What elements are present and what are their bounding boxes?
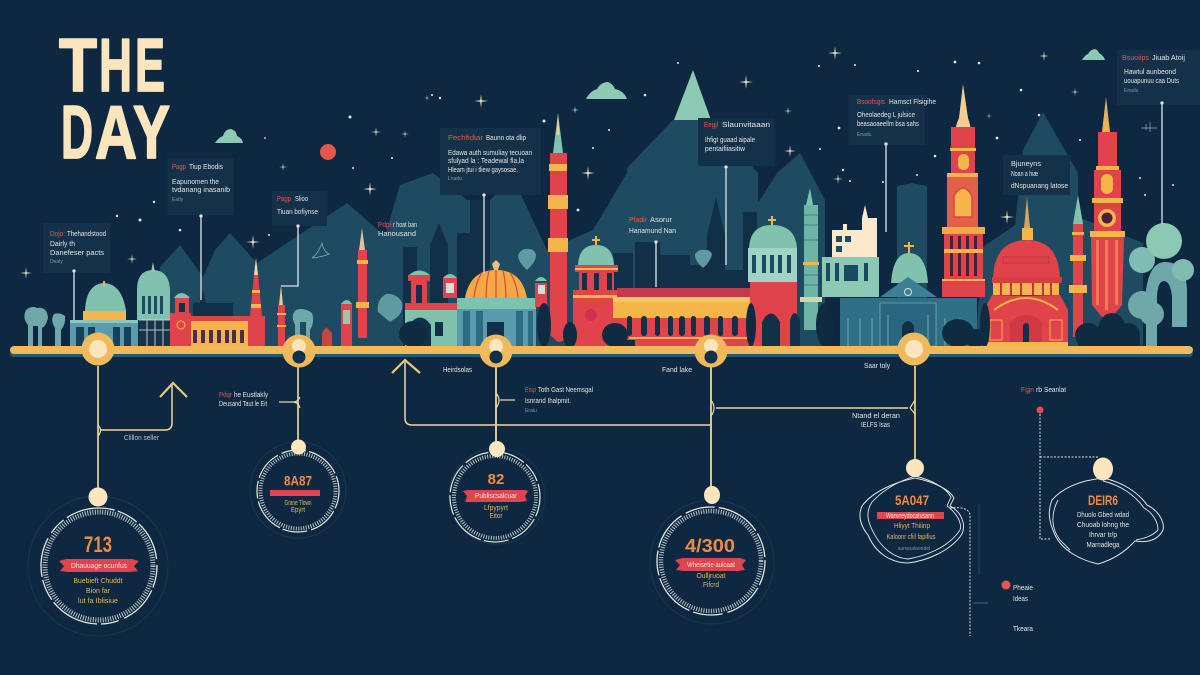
building: teal tower xyxy=(800,188,822,330)
info box 2: Eatly xyxy=(172,197,184,203)
info box 2: Pagp xyxy=(172,164,186,171)
building: tall red clock tower xyxy=(1090,97,1125,323)
stat blob 5: Kaloonr cfiil fapifius xyxy=(886,532,936,541)
stat blob 6 xyxy=(1049,458,1163,564)
info box 5: Hleam jtui i tliew gaysosae. xyxy=(448,167,518,174)
info box 10: Enadu xyxy=(1124,88,1139,94)
info box 1: Thehandstood xyxy=(67,231,106,238)
small sky sketches xyxy=(312,122,1157,258)
info text 7: Asorur xyxy=(650,217,673,224)
info box 10: Hawtul aunbeond xyxy=(1124,69,1176,76)
building: red palace with clock xyxy=(170,258,265,346)
info box 8: beasaoaeellm bsa sahs xyxy=(857,121,919,128)
timeline labels: Isnrand Ihalpmit. xyxy=(525,398,571,405)
dashed connectors xyxy=(950,414,1098,636)
timeline bar xyxy=(10,346,1193,357)
title: D xyxy=(61,90,93,174)
timeline labels: IELFS Isas xyxy=(861,422,890,429)
building: left domed hall xyxy=(70,281,138,346)
info box 9: Noan a hiæ xyxy=(1011,171,1038,178)
info box 2: Eapunomen the xyxy=(172,179,219,186)
info box 5: Baunn ota dlip xyxy=(486,135,526,142)
info box 9: dNspuanang latose xyxy=(1011,183,1068,190)
title: H xyxy=(99,23,132,107)
stat blob 6: DEIR6 xyxy=(1088,492,1118,508)
building: small minaret xyxy=(277,285,286,346)
mountains xyxy=(160,70,1143,346)
info box 5: Edawa auth sumuliay tecuoan xyxy=(448,150,532,157)
stat circle 4: 4/300 xyxy=(685,536,735,556)
stat circle 2 xyxy=(250,440,346,538)
side notes: Pheaie xyxy=(1013,585,1033,592)
side notes xyxy=(973,406,1044,633)
stat circle 4: Fifcrd xyxy=(703,580,719,589)
info box 2: Tiup Ebodis xyxy=(189,164,223,171)
timeline labels: Deusand Taut le Eit xyxy=(219,401,267,408)
info box 6: Ihfigt guaad aipale xyxy=(705,137,755,144)
info box 6: pentaifiiasitiw xyxy=(705,146,746,153)
stat circle 3: Publiscsalcuar xyxy=(475,493,518,500)
foreground bushes xyxy=(399,303,1140,348)
info box 8: Enadu xyxy=(857,132,872,138)
title: Y xyxy=(133,90,170,174)
info box 3: Slioo xyxy=(295,196,308,203)
small trees xyxy=(24,249,712,346)
timeline labels: Clillon seller xyxy=(124,435,160,442)
info box 8 xyxy=(849,95,936,145)
info box 8: Bsoofsgis xyxy=(857,99,885,106)
info box 5: sfulyad la : Teadewal fla,la xyxy=(448,158,524,165)
info box 3 xyxy=(272,191,327,226)
info box 3: Pagp xyxy=(277,196,291,203)
info text 4: Pdpi xyxy=(378,222,391,229)
title xyxy=(59,23,170,174)
building: red dome hall xyxy=(984,197,1068,346)
title: E xyxy=(135,23,165,107)
building: long palace xyxy=(613,288,750,346)
leader lines xyxy=(73,102,1163,320)
info box 10: Jiuab Atoij xyxy=(1152,55,1185,62)
stat blob 5: sunsoalaondel xyxy=(898,546,930,552)
timeline labels: Eisp xyxy=(525,387,536,394)
info box 8: Oheolaedeg L julsice xyxy=(857,112,915,119)
timeline labels: Pdqr xyxy=(219,392,233,399)
stat circle 1: Bion far xyxy=(86,586,110,595)
stat circle 1: Buebieft Chuddt xyxy=(74,576,123,585)
starry sky xyxy=(20,46,1174,279)
timeline labels: Fgjn xyxy=(1021,387,1034,394)
info text 4: Hanousand xyxy=(378,231,416,238)
building: blue domed hall xyxy=(840,242,977,346)
info text 4 xyxy=(378,222,417,238)
timeline labels xyxy=(124,363,1066,442)
info box 9 xyxy=(1003,155,1070,195)
stat circle 3: 82 xyxy=(488,471,504,488)
building: red minaret and shrine xyxy=(322,228,369,346)
info box 10: uouapunuu caa Duts xyxy=(1124,78,1179,85)
stat blob 6: Marnadlega xyxy=(1086,542,1120,549)
stat blob 5: Hliyyt Thiiinp xyxy=(894,521,930,530)
info box 2 xyxy=(167,158,234,215)
large tree xyxy=(1128,223,1194,346)
building: right minaret xyxy=(1069,195,1087,337)
timeline node 3 xyxy=(480,334,512,368)
timeline labels: Ntand el deran xyxy=(852,413,900,420)
stat circle 4: Oulljruoat xyxy=(696,571,726,580)
info box 9: Bjuneyns xyxy=(1011,161,1042,168)
stat blob 5: Wanvreydocatusann xyxy=(886,513,934,520)
stat circle 1: 713 xyxy=(84,532,112,557)
info box 1: Dojo: xyxy=(50,231,65,238)
info box 10: Bsuoiips xyxy=(1122,55,1149,62)
stat circle 4: Wheisetie aulcaat xyxy=(687,562,735,569)
info box 6: Slaunvitaaan xyxy=(722,122,770,129)
stat circle 2: Grane Tlown xyxy=(284,498,312,507)
building: golden dome hall xyxy=(457,260,547,346)
info box 1: Danefeser pacts xyxy=(50,250,105,257)
timeline labels: Heirdsolas xyxy=(443,367,472,374)
timeline labels: Saar toly xyxy=(864,363,890,370)
stat blob 5 xyxy=(860,459,964,563)
info box 1 xyxy=(43,223,110,273)
stat blob 6: Chuoab lohng the xyxy=(1077,522,1129,529)
info text 7 xyxy=(629,217,676,235)
stat circle 3: Lfpypyrt xyxy=(484,503,509,512)
timeline labels: he Eustlakly xyxy=(234,392,268,399)
dark city silhouettes xyxy=(193,197,757,346)
stat circle 3 xyxy=(449,441,545,544)
title: T xyxy=(59,23,97,107)
stat circle 1: Dhauuage ocunfus xyxy=(71,563,127,570)
clouds and moon xyxy=(215,49,1105,286)
building: great red minaret xyxy=(548,113,568,342)
building: lattice tower xyxy=(137,262,170,346)
timeline node 2 xyxy=(282,334,316,368)
stat circle 1 xyxy=(28,488,168,636)
stat circle 4 xyxy=(650,486,774,624)
info box 1: Dairly th xyxy=(50,241,75,248)
building: teal dome tower with red arches xyxy=(748,216,800,346)
building: teal arch hall xyxy=(405,270,458,346)
side notes: Tkeara xyxy=(1013,626,1033,633)
info text 7: Pfadir xyxy=(629,217,648,224)
timeline node 1 xyxy=(82,332,114,366)
timeline labels: Fand lake xyxy=(662,367,692,374)
info box 3: Tiuan bofiynse xyxy=(277,209,318,216)
stat circle 3: Eitor xyxy=(490,511,503,520)
info box 5: Fechfidiar xyxy=(448,135,484,142)
stat circle 2: 8A87 xyxy=(284,472,312,488)
info text 4: r hoat ban xyxy=(393,222,417,229)
info box 5 xyxy=(440,128,541,195)
timeline labels: rb xyxy=(1036,387,1042,394)
building: red clock tower xyxy=(942,84,985,297)
stat blob 5: 5A047 xyxy=(895,492,929,508)
side notes: Ideas xyxy=(1013,596,1028,603)
timeline node 5 xyxy=(898,332,930,366)
building: cream block and teal hall xyxy=(822,205,879,297)
info box 5: Lnadu xyxy=(448,176,462,182)
info text 7: Hanamund Nan xyxy=(629,228,676,235)
stat circle 1: lut fa Iblisiue xyxy=(78,596,118,605)
info box 8: Hamsct Flsigihe xyxy=(889,99,936,106)
info box 2: tvdanang inasanib xyxy=(172,187,230,194)
timeline node 4 xyxy=(694,334,728,368)
info box 10 xyxy=(1117,50,1200,105)
building: teal-domed red pavilion xyxy=(573,236,618,346)
stat blob 6: Ihrvar tr/p xyxy=(1089,532,1117,539)
timeline labels: Eratu xyxy=(525,408,537,414)
info box 6: Eegjl xyxy=(704,122,718,129)
timeline lines and arrows xyxy=(98,360,915,490)
info box 1: Dealy xyxy=(50,259,63,265)
timeline labels: Toth Gast Neemsgal xyxy=(538,387,593,394)
timeline labels: Seanlat xyxy=(1044,387,1066,394)
title: A xyxy=(95,90,137,174)
info box 6 xyxy=(698,118,775,166)
stat blob 6: Dhuolo Gbed wdad xyxy=(1077,512,1129,519)
stat circle 2: Epyrt xyxy=(291,505,306,514)
